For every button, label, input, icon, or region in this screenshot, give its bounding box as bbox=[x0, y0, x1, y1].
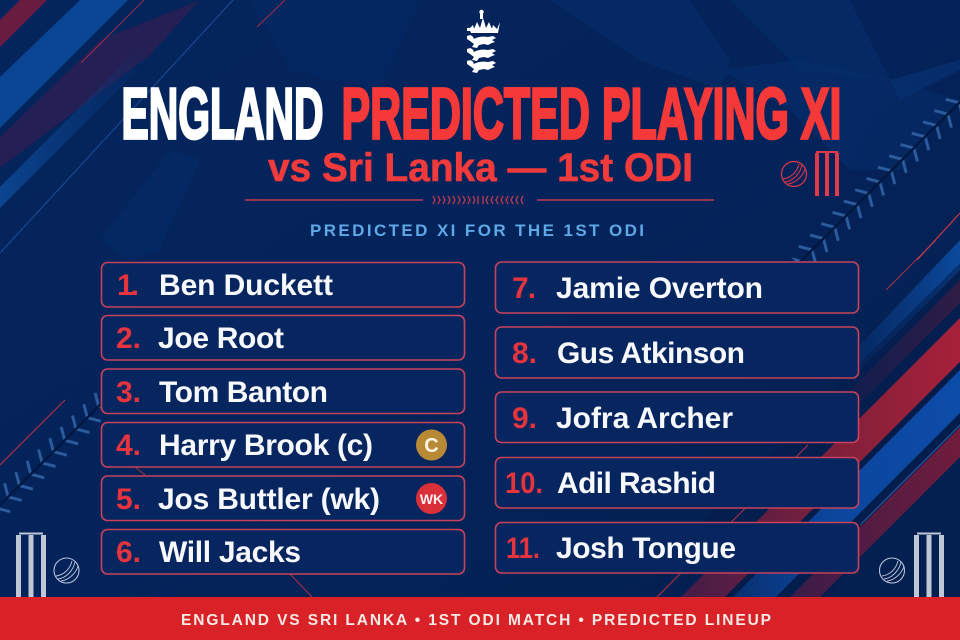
player 1: 1. bbox=[117, 269, 139, 302]
player 5: Jos Buttler (wk) bbox=[158, 483, 380, 516]
player 11 bbox=[496, 522, 858, 573]
player 11: Josh Tongue bbox=[556, 532, 736, 565]
player 11: 11. bbox=[506, 532, 540, 565]
footer banner bbox=[0, 597, 960, 640]
player 10: Adil Rashid bbox=[557, 467, 716, 500]
captain badge: C bbox=[424, 435, 439, 457]
player 6: 6. bbox=[116, 536, 141, 569]
wicketkeeper badge: WK bbox=[420, 491, 443, 507]
player 8: 8. bbox=[512, 337, 537, 370]
player 2 bbox=[102, 316, 464, 360]
left red line bbox=[0, 400, 65, 465]
player 4: 4. bbox=[116, 429, 141, 462]
player 9: 9. bbox=[512, 402, 537, 435]
panel: players 7 to 11 bbox=[496, 262, 858, 573]
title: ENGLAND bbox=[122, 74, 324, 154]
subtitle: vs Sri Lanka — 1st ODI bbox=[268, 146, 693, 190]
player 9 bbox=[496, 392, 858, 442]
player 8 bbox=[496, 327, 858, 378]
ball seam: left bbox=[0, 387, 118, 522]
player 1: Ben Duckett bbox=[159, 269, 333, 302]
player 6 bbox=[102, 530, 464, 574]
player 2: 2. bbox=[116, 322, 141, 355]
right stripes bbox=[657, 213, 960, 598]
player 5: 5. bbox=[116, 483, 141, 516]
player 5 bbox=[102, 476, 464, 520]
icon: right stumps and ball bbox=[880, 532, 944, 598]
captain badge bbox=[416, 430, 447, 460]
left stripes bbox=[0, 0, 285, 253]
player 1 bbox=[102, 262, 464, 307]
icon: left stumps and ball bbox=[16, 532, 79, 598]
player 4: Harry Brook (c) bbox=[159, 429, 373, 462]
player 3: 3. bbox=[116, 376, 141, 409]
player 7 bbox=[496, 262, 858, 313]
divider with stitches bbox=[245, 196, 714, 204]
player 4 bbox=[102, 422, 464, 467]
player 3 bbox=[102, 369, 464, 414]
player 10: 10. bbox=[505, 467, 543, 500]
footer banner: ENGLAND VS SRI LANKA • 1ST ODI MATCH • PREDICTED LINEUP bbox=[181, 612, 771, 629]
section label: PREDICTED XI FOR THE 1ST ODI bbox=[310, 221, 644, 240]
player 9: Jofra Archer bbox=[556, 402, 733, 435]
icon: red cricket ball and stumps bbox=[782, 152, 839, 196]
title bbox=[122, 74, 842, 154]
ball seam: right bbox=[787, 89, 960, 275]
player 10 bbox=[496, 458, 858, 508]
player 7: Jamie Overton bbox=[556, 272, 763, 305]
panel: players 1 to 6 bbox=[102, 262, 464, 574]
player 6: Will Jacks bbox=[159, 536, 301, 569]
player 3: Tom Banton bbox=[159, 376, 328, 409]
icon: England crest bbox=[466, 10, 500, 73]
player 2: Joe Root bbox=[158, 322, 284, 355]
player 8: Gus Atkinson bbox=[557, 337, 745, 370]
wicketkeeper badge bbox=[416, 483, 447, 514]
player 7: 7. bbox=[512, 272, 536, 305]
